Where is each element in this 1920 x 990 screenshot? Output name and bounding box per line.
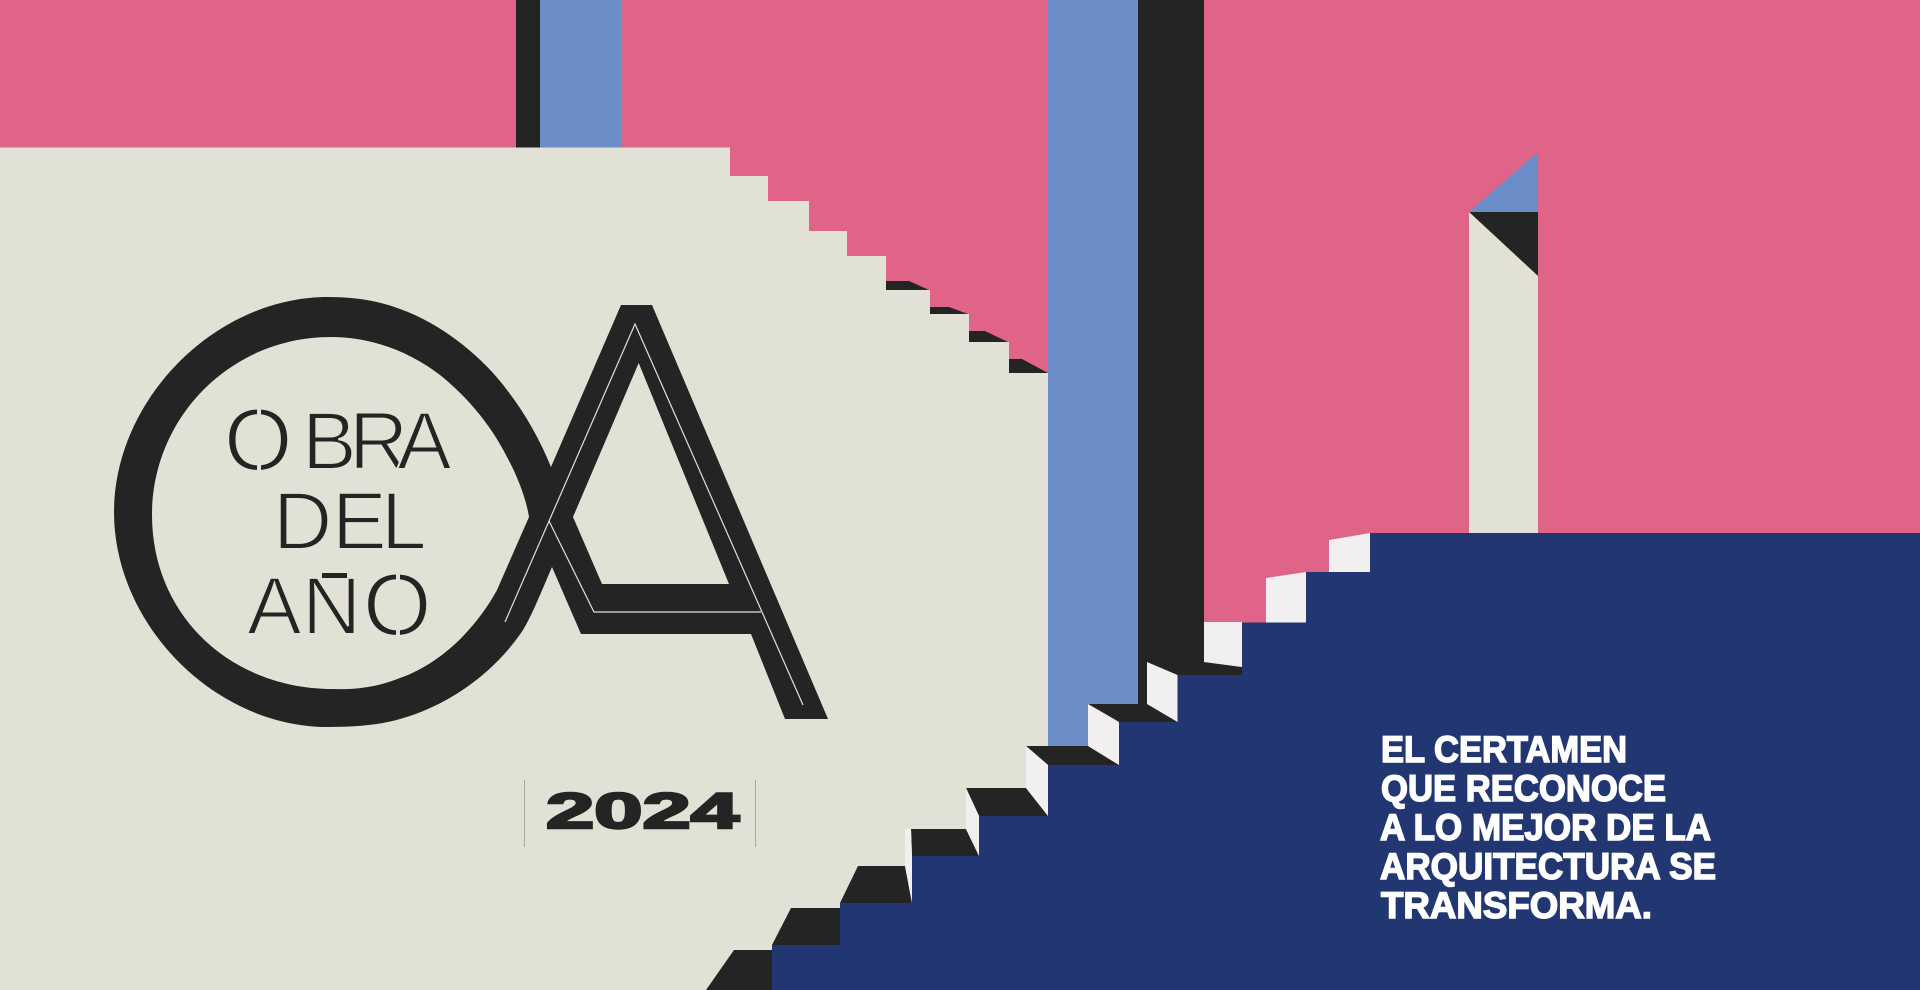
text block: tagline: A LO MEJOR DE LA: [1380, 807, 1711, 848]
text block: tagline: TRANSFORMA.: [1381, 885, 1652, 926]
logo wordmark: OBRA DEL AÑO: DEL: [273, 476, 427, 567]
text block: tagline: ARQUITECTURA SE: [1380, 846, 1716, 887]
column: large blue bar: [1048, 0, 1138, 746]
upper stair shadows: [886, 281, 1048, 373]
stair treads in black: [706, 704, 1178, 990]
stair risers in white: [905, 533, 1370, 903]
logo wordmark: OBRA DEL AÑO: O: [224, 390, 292, 489]
year: 2024: 2024: [546, 783, 739, 839]
logo: OA monogram: [114, 297, 828, 727]
logo wordmark: OBRA DEL AÑO: AÑ: [247, 561, 361, 652]
text block: tagline: [1380, 729, 1716, 926]
column: small black and blue bars: [516, 0, 621, 150]
text block: tagline: EL CERTAMEN: [1381, 729, 1627, 770]
panel: beige stepped area: [0, 148, 1048, 990]
logo wordmark: OBRA DEL AÑO: O: [363, 555, 431, 654]
obelisk: [1469, 152, 1538, 534]
logo wordmark: OBRA DEL AÑO: [224, 390, 452, 654]
logo wordmark: OBRA DEL AÑO: BRA: [302, 396, 452, 487]
panel: navy stepped block: [772, 533, 1920, 990]
column: large black bar: [1138, 0, 1242, 722]
text block: tagline: QUE RECONOCE: [1381, 768, 1666, 809]
